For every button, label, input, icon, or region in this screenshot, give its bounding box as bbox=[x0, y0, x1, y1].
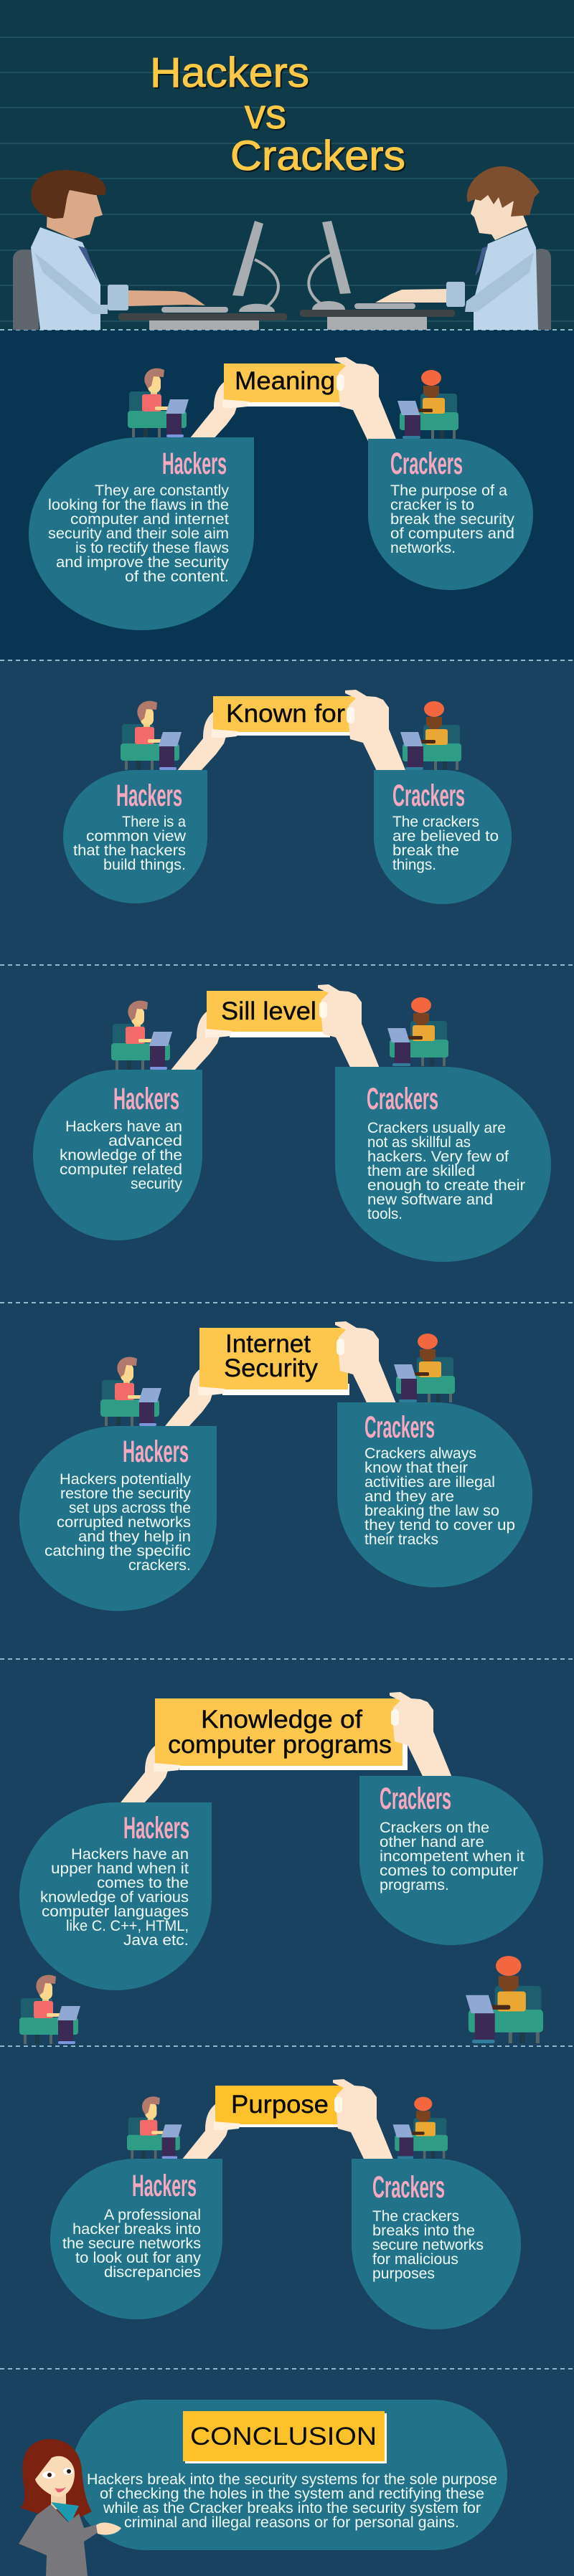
panel: hackers knowledge: knowledge of various bbox=[40, 1889, 189, 1906]
icon: left hand bbox=[170, 712, 227, 779]
panel: crackers known for: Crackers bbox=[392, 779, 465, 813]
panel: crackers internet security bbox=[337, 1402, 532, 1587]
icon: seated cracker bbox=[393, 2097, 448, 2159]
panel: hackers internet security: Hackers bbox=[123, 1435, 189, 1469]
icon: seated cracker bbox=[394, 1334, 455, 1402]
panel: hackers meaning: and improve the security bbox=[56, 554, 230, 571]
panel: crackers known for: things. bbox=[392, 857, 436, 873]
panel: crackers meaning: networks. bbox=[390, 540, 456, 556]
panel: hackers meaning bbox=[29, 437, 254, 630]
icon: seated hacker bbox=[128, 369, 189, 437]
panel: crackers known for: break the bbox=[392, 842, 459, 859]
panel: crackers skill: Crackers bbox=[367, 1082, 438, 1116]
panel: crackers internet security: their tracks bbox=[364, 1531, 438, 1548]
panel: hackers knowledge: upper hand when it bbox=[51, 1860, 189, 1877]
panel: crackers meaning bbox=[368, 439, 533, 590]
icon: right hand bbox=[335, 1321, 402, 1417]
sign: Internet Security: Security bbox=[224, 1354, 319, 1382]
sign: Sill level: Sill level bbox=[221, 997, 316, 1025]
icon: right hand bbox=[390, 1692, 456, 1788]
icon: thumb bbox=[154, 1763, 180, 1772]
panel: crackers purpose: purposes bbox=[372, 2266, 435, 2282]
panel: crackers internet security: Crackers always bbox=[364, 1445, 476, 1462]
panel: crackers skill: them are skilled bbox=[367, 1163, 475, 1179]
panel: crackers purpose: breaks into the bbox=[372, 2223, 475, 2239]
icon: thumb bbox=[205, 1029, 232, 1037]
panel: hackers known for: There is a bbox=[122, 814, 186, 830]
panel: crackers purpose: for malicious bbox=[372, 2251, 458, 2268]
icon: thumb bbox=[222, 399, 249, 408]
sign: Sill level bbox=[207, 991, 331, 1037]
icon: left hand bbox=[164, 1012, 221, 1079]
panel: hackers internet security: and they help in bbox=[78, 1529, 191, 1545]
icon: seated hacker bbox=[121, 701, 182, 770]
icon: thumb bbox=[212, 729, 238, 738]
icon: left hand bbox=[156, 1369, 214, 1437]
illustration: left man at computer bbox=[13, 170, 287, 330]
panel: crackers knowledge: comes to computer bbox=[380, 1863, 518, 1879]
icon: right hand bbox=[333, 2079, 400, 2175]
sign: Meaning: Meaning bbox=[235, 367, 335, 395]
text: conclusion body: Hackers break into the security systems for the sole purpose bbox=[87, 2471, 497, 2488]
icon: seated hacker bbox=[100, 1357, 161, 1426]
panel: hackers purpose: Hackers bbox=[132, 2169, 197, 2203]
panel: crackers skill: tools. bbox=[367, 1206, 403, 1222]
panel: hackers knowledge bbox=[19, 1802, 212, 1990]
sign: Knowledge of computer programs bbox=[155, 1698, 408, 1770]
panel: crackers internet security: breaking the law so bbox=[364, 1503, 499, 1519]
panel: hackers purpose: to look out for any bbox=[75, 2250, 202, 2266]
icon: thumb bbox=[198, 1387, 225, 1395]
panel: crackers internet security: and they are bbox=[364, 1488, 454, 1505]
panel: crackers knowledge bbox=[359, 1776, 543, 1945]
title: vs bbox=[245, 91, 286, 138]
panel: hackers purpose: the secure networks bbox=[62, 2235, 201, 2252]
panel: crackers internet security: they tend to cover up bbox=[364, 1517, 515, 1534]
panel: hackers meaning: Hackers bbox=[162, 447, 227, 481]
title: Crackers bbox=[230, 133, 405, 179]
panel: crackers known for: The crackers bbox=[392, 814, 479, 830]
panel: hackers skill: knowledge of the bbox=[60, 1147, 182, 1164]
sign: Internet Security: Internet bbox=[225, 1330, 311, 1358]
panel: crackers skill: enough to create their bbox=[367, 1177, 525, 1194]
panel: crackers knowledge: incompetent when it bbox=[380, 1848, 524, 1865]
panel: crackers internet security: know that their bbox=[364, 1460, 468, 1476]
panel: crackers meaning: break the security bbox=[390, 511, 515, 528]
panel: crackers purpose: secure networks bbox=[372, 2237, 484, 2253]
panel: crackers internet security: activities are illegal bbox=[364, 1474, 495, 1491]
icon: left hand bbox=[112, 1746, 169, 1813]
section: Known for bbox=[63, 690, 512, 904]
sign: Purpose bbox=[215, 2086, 346, 2127]
panel: crackers knowledge: programs. bbox=[380, 1877, 449, 1893]
icon: right hand bbox=[318, 984, 385, 1080]
icon: right hand bbox=[345, 690, 412, 786]
illustration: woman presenting bbox=[19, 2439, 121, 2576]
icon: right hand bbox=[335, 357, 402, 453]
panel: crackers meaning: cracker is to bbox=[390, 497, 474, 513]
panel: crackers known for: are believed to bbox=[392, 828, 499, 845]
panel: hackers internet security: corrupted networks bbox=[57, 1514, 191, 1531]
section: Internet Security bbox=[19, 1321, 532, 1611]
panel: crackers known for bbox=[374, 770, 512, 904]
sign: Internet Security bbox=[199, 1328, 349, 1395]
sign: Knowledge of computer programs: computer programs bbox=[168, 1731, 392, 1759]
icon: left hand bbox=[172, 2104, 230, 2172]
sign: Knowledge of computer programs: Knowledge of bbox=[201, 1706, 362, 1734]
icon: seated hacker bbox=[111, 1001, 172, 1070]
panel: hackers known for: common view bbox=[86, 828, 187, 845]
panel: crackers knowledge: other hand are bbox=[380, 1834, 484, 1850]
panel: crackers skill: not as skillful as bbox=[367, 1134, 471, 1151]
text: conclusion body bbox=[87, 2471, 497, 2531]
panel: crackers skill bbox=[335, 1067, 551, 1262]
panel: hackers internet security: Hackers potentially bbox=[60, 1471, 192, 1488]
panel: hackers knowledge: Hackers have an bbox=[71, 1846, 189, 1863]
panel: crackers skill: hackers. Very few of bbox=[367, 1149, 509, 1165]
panel: crackers skill: new software and bbox=[367, 1192, 493, 1208]
panel: hackers knowledge: Java etc. bbox=[123, 1932, 189, 1949]
panel: hackers internet security: catching the specific bbox=[44, 1543, 191, 1559]
section: Skill level bbox=[33, 984, 551, 1262]
panel: hackers knowledge: Hackers bbox=[123, 1811, 189, 1845]
panel: crackers skill: Crackers usually are bbox=[367, 1120, 506, 1136]
panel: hackers internet security bbox=[19, 1426, 217, 1611]
panel: hackers meaning: looking for the flaws in the bbox=[48, 497, 229, 513]
title: Hackers bbox=[150, 49, 309, 96]
icon: seated hacker bbox=[127, 2096, 182, 2159]
text: conclusion body: while as the Cracker breaks into the security system for bbox=[103, 2500, 481, 2516]
panel: hackers meaning: They are constantly bbox=[95, 483, 230, 499]
section: Purpose bbox=[50, 2079, 521, 2329]
panel: crackers purpose: Crackers bbox=[372, 2170, 445, 2205]
panel: hackers known for bbox=[63, 770, 207, 903]
panel: hackers meaning: computer and internet bbox=[70, 511, 229, 528]
panel: hackers skill: Hackers bbox=[113, 1082, 179, 1116]
illustration: right man at computer bbox=[300, 166, 551, 330]
panel: hackers skill: computer related bbox=[60, 1161, 182, 1178]
text: conclusion body: of checking the holes in the system and rectifying these bbox=[100, 2486, 484, 2502]
panel: hackers internet security: crackers. bbox=[128, 1557, 191, 1574]
title bbox=[150, 49, 405, 179]
icon: seated cracker bbox=[466, 1956, 543, 2043]
panel: crackers purpose bbox=[352, 2159, 521, 2329]
panel: hackers internet security: restore the security bbox=[60, 1486, 192, 1502]
panel: hackers purpose bbox=[50, 2159, 222, 2319]
panel: hackers purpose: A professional bbox=[104, 2207, 201, 2223]
panel: hackers knowledge: comes to the bbox=[97, 1875, 189, 1891]
panel: crackers knowledge: Crackers on the bbox=[380, 1820, 489, 1836]
panel: crackers knowledge: Crackers bbox=[380, 1782, 451, 1816]
sign: Purpose: Purpose bbox=[231, 2091, 329, 2119]
heading: conclusion bbox=[183, 2411, 387, 2463]
icon: seated cracker bbox=[387, 997, 448, 1066]
panel: hackers knowledge: like C. C++, HTML, bbox=[66, 1918, 189, 1934]
panel: hackers purpose: hacker breaks into bbox=[72, 2221, 201, 2238]
panel: hackers skill: advanced bbox=[108, 1133, 182, 1149]
section: Meaning bbox=[29, 357, 533, 630]
panel: crackers meaning: of computers and bbox=[390, 526, 514, 542]
panel: hackers knowledge: computer languages bbox=[42, 1904, 189, 1920]
panel: hackers known for: that the hackers bbox=[73, 842, 186, 859]
panel: header background bbox=[0, 0, 574, 330]
panel: hackers known for: Hackers bbox=[116, 779, 182, 813]
panel: crackers internet security: Crackers bbox=[364, 1410, 435, 1445]
panel: conclusion bbox=[71, 2400, 507, 2550]
panel: hackers meaning: of the content. bbox=[125, 569, 229, 585]
panel: hackers known for: build things. bbox=[103, 857, 186, 873]
icon: thumb bbox=[214, 2121, 240, 2130]
panel: hackers skill: security bbox=[131, 1176, 182, 1192]
icon: seated hacker bbox=[19, 1975, 80, 2044]
panel: hackers skill: Hackers have an bbox=[65, 1118, 182, 1135]
icon: seated cracker bbox=[400, 701, 461, 770]
panel: crackers meaning: Crackers bbox=[390, 447, 463, 481]
panel: hackers meaning: security and their sole aim bbox=[48, 526, 229, 542]
panel: hackers meaning: is to rectify these flaws bbox=[75, 540, 229, 556]
panel: crackers meaning: The purpose of a bbox=[390, 483, 507, 499]
icon: left hand bbox=[181, 382, 238, 450]
section: Knowledge of computer programs bbox=[19, 1692, 543, 2044]
icon: seated cracker bbox=[397, 370, 458, 439]
panel: crackers purpose: The crackers bbox=[372, 2208, 459, 2225]
sign: Known for: Known for bbox=[226, 700, 345, 728]
text: conclusion body: criminal and illegal reasons or for personal gains. bbox=[124, 2514, 459, 2531]
panel: hackers skill bbox=[33, 1070, 202, 1240]
panel: hackers purpose: discrepancies bbox=[104, 2264, 201, 2281]
sign: Meaning bbox=[224, 363, 348, 407]
heading: conclusion: CONCLUSION bbox=[190, 2423, 377, 2451]
sign: Known for bbox=[213, 696, 358, 736]
panel: hackers internet security: set ups across the bbox=[69, 1500, 191, 1516]
